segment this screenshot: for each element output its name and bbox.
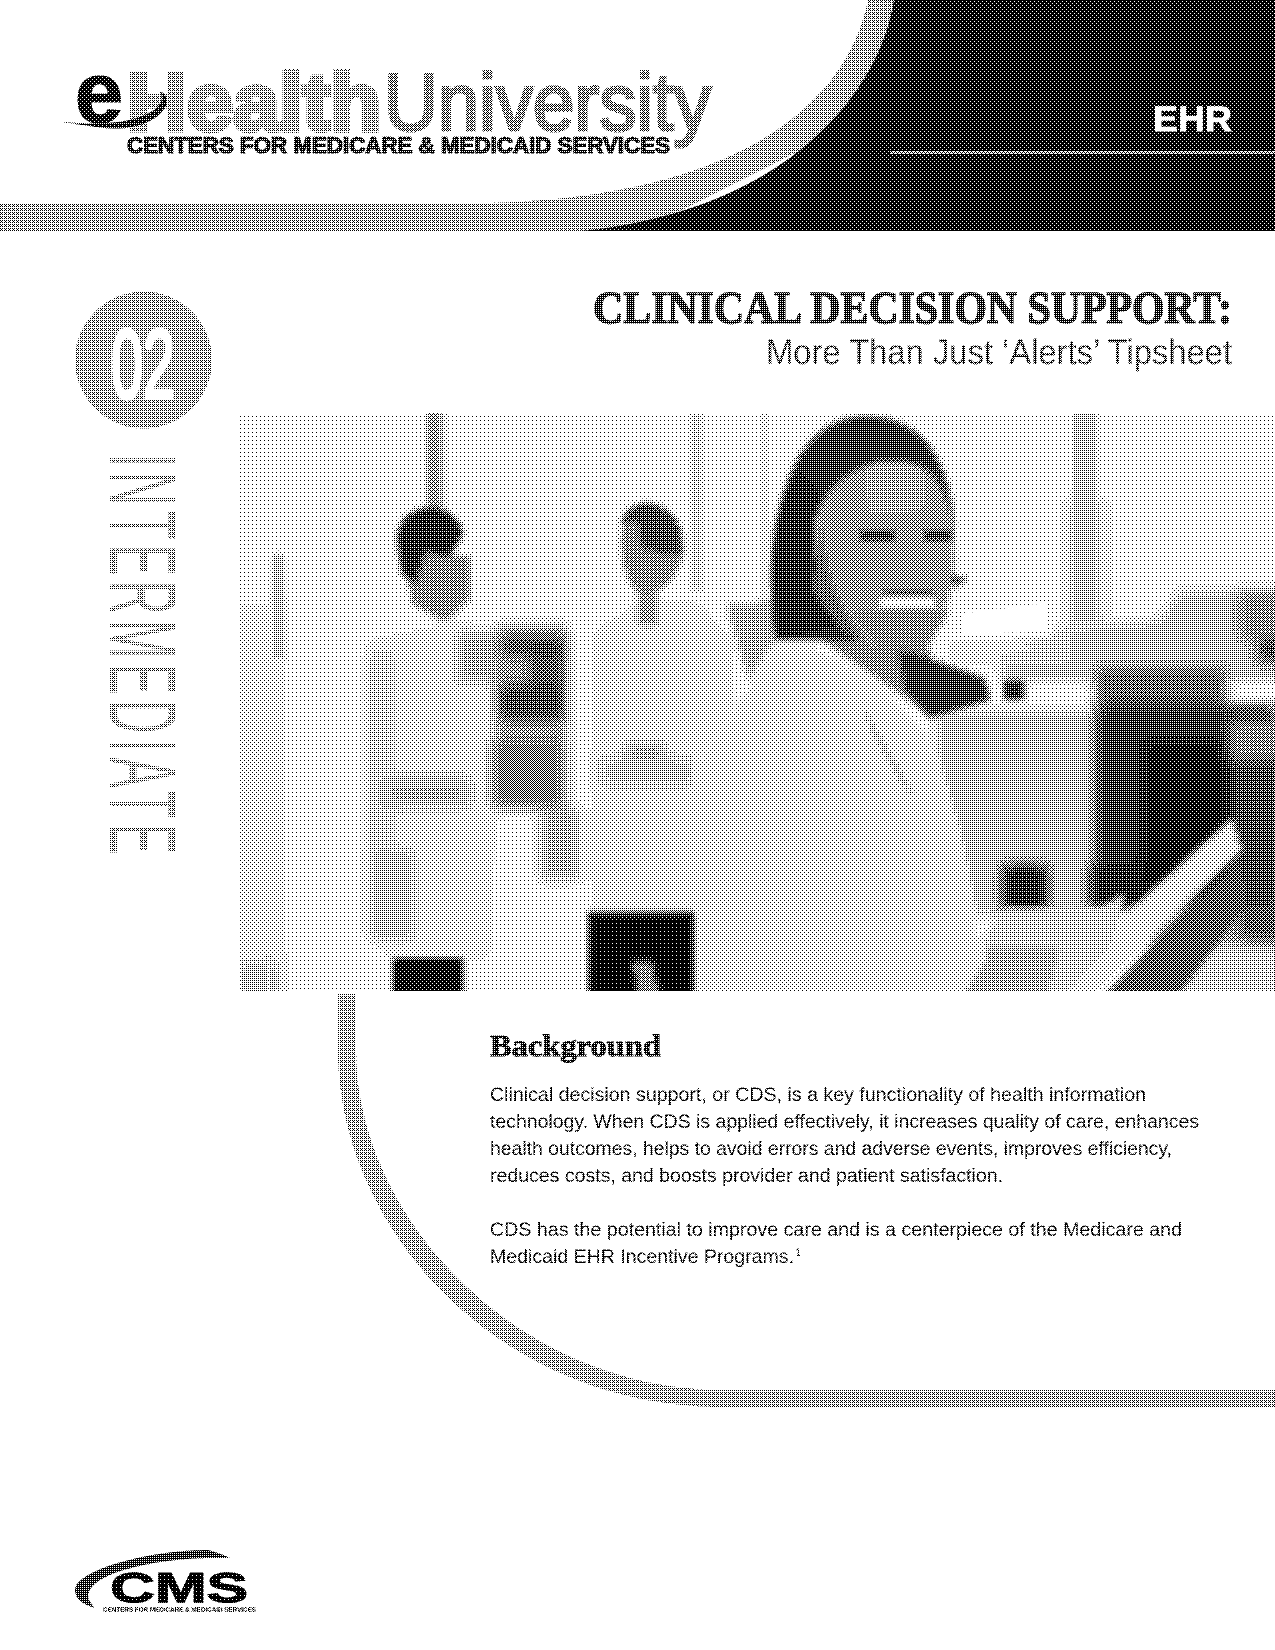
- hand on tablet: [978, 893, 1128, 991]
- background section: [490, 1028, 1199, 1268]
- curved divider around background text: [338, 994, 1275, 1407]
- colleague one legs: [393, 958, 463, 998]
- colleague one head: [403, 552, 470, 622]
- woman eyes: [860, 531, 894, 540]
- logo: CMS: [75, 1550, 256, 1614]
- woman smile: [880, 597, 935, 608]
- photo: clinician with tablet and two colleagues: [240, 413, 1275, 991]
- paragraph one: [490, 1084, 1199, 1187]
- header grey band: [0, 203, 600, 231]
- colleague two legs: [588, 912, 696, 1002]
- woman neck: [800, 625, 950, 712]
- background heading: Background: [490, 1028, 661, 1063]
- logo letter e: e: [75, 46, 123, 141]
- title: [593, 283, 1232, 372]
- subheading: More Than Just ‘Alerts’ Tipsheet: [766, 333, 1232, 372]
- paragraph two: 1: [795, 1247, 801, 1259]
- section tag: EHR: EHR: [1153, 100, 1232, 139]
- colleague two body: [590, 600, 735, 910]
- header swoosh: [490, 0, 900, 231]
- background columns: [427, 400, 443, 515]
- paragraph one: technology. When CDS is applied effectively, it increases quality of care, enhances: [490, 1111, 1199, 1133]
- logo word University: University: [384, 58, 711, 148]
- background shelves and cabinet: [935, 711, 1103, 916]
- woman shirt: [694, 625, 986, 1000]
- CMS caption: CENTERS FOR MEDICARE & MEDICAID SERVICES: [103, 1605, 256, 1614]
- main heading: CLINICAL DECISION SUPPORT:: [593, 283, 1232, 333]
- photo background: [240, 413, 1275, 991]
- logo word Health: Health: [127, 58, 381, 148]
- CMS letters: CMS: [110, 1564, 248, 1611]
- header dark panel: [581, 0, 1275, 231]
- badge circle: [75, 292, 212, 428]
- dark tablet underside: [1100, 855, 1250, 1000]
- paragraph two: CDS has the potential to improve care and is a centerpiece of the Medicare and: [490, 1219, 1182, 1241]
- colleague two head: [637, 592, 657, 626]
- woman: [694, 416, 1050, 1000]
- logo subtitle: CENTERS FOR MEDICARE & MEDICAID SERVICES: [127, 133, 670, 158]
- badge number: 02: [111, 309, 175, 419]
- paragraph one: health outcomes, helps to avoid errors and adverse events, improves efficiency,: [490, 1138, 1172, 1160]
- paragraph one: reduces costs, and boosts provider and patient satisfaction.: [490, 1165, 1003, 1187]
- paragraph two: Medicaid EHR Incentive Programs.: [490, 1246, 794, 1268]
- colleague one body: [367, 620, 500, 960]
- tablet: [1030, 818, 1242, 1000]
- dotted divider line: [890, 151, 1275, 154]
- logo: eHealth University: [62, 46, 711, 158]
- central clutter between colleagues: [457, 632, 499, 682]
- woman hair: [772, 416, 954, 640]
- bright wall right of face: [958, 598, 1050, 640]
- CMS swoosh: [75, 1550, 230, 1608]
- level label: INTERMEDIATE: INTERMEDIATE: [90, 454, 197, 860]
- header banner: [0, 0, 1275, 231]
- paragraph one: Clinical decision support, or CDS, is a key functionality of health information: [490, 1084, 1146, 1106]
- woman face: [813, 461, 955, 650]
- level badge: 02: [75, 292, 212, 428]
- paragraph two: [490, 1219, 1182, 1268]
- logo swoosh: [62, 92, 167, 129]
